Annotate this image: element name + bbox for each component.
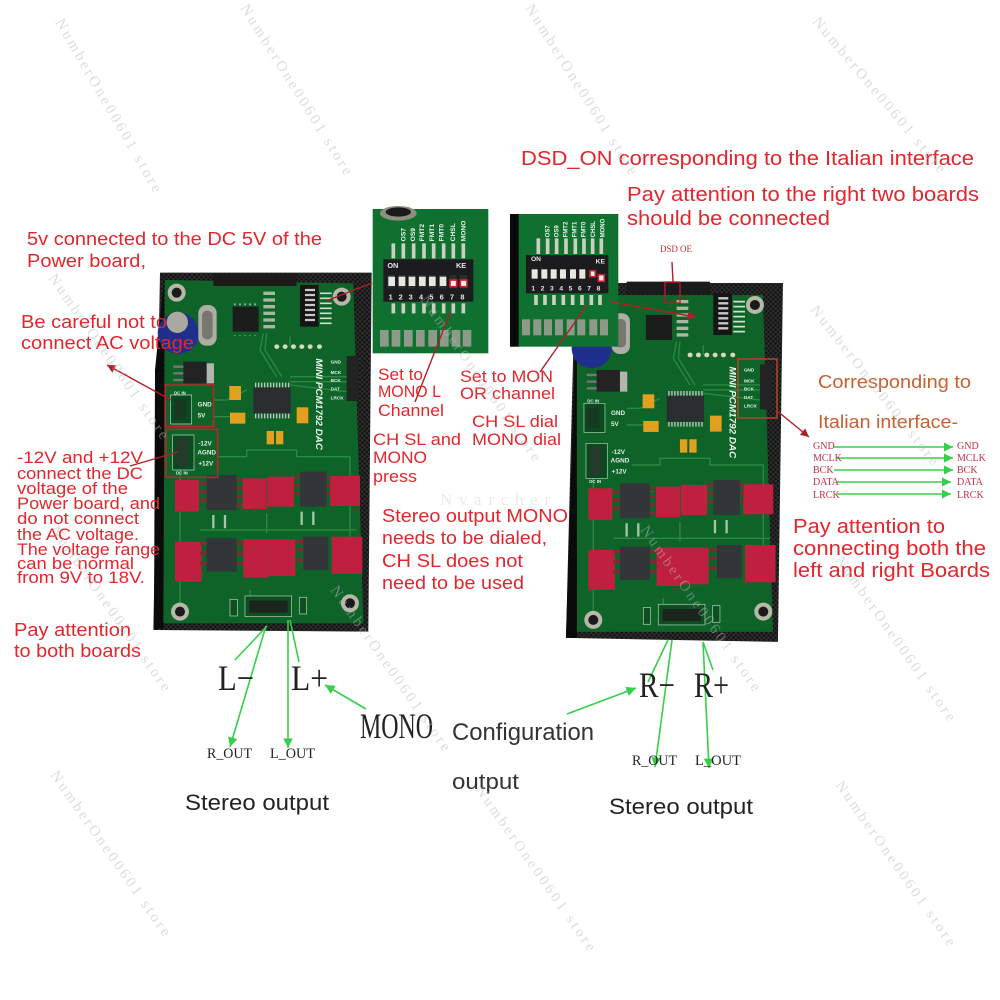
annotation: MONO L channel: Set to	[378, 365, 423, 384]
annotation: stereo output mode: needs to be dialed,	[382, 528, 547, 548]
output pin labels	[207, 658, 741, 769]
output pin labels: L_OUT	[270, 746, 315, 762]
label: DSD OE: DSD OE	[660, 244, 692, 254]
annotation: 12V supply: Power board, and	[17, 494, 160, 513]
annotation: MONO R channel: Set to MON	[460, 367, 553, 386]
annotation: both boards	[14, 620, 141, 661]
right PCB board: -12V	[612, 449, 626, 456]
annotation: 12V supply: can be normal	[17, 554, 134, 573]
store watermarks: NumberOne00601 store	[47, 523, 174, 695]
interface signal table: LRCK	[813, 490, 840, 501]
annotation: both boards: to both boards	[14, 641, 141, 661]
right DIP switch inset: 2	[541, 286, 545, 293]
right DIP switch inset: 7	[587, 286, 591, 293]
left PCB board: DAT	[331, 387, 340, 392]
store watermarks: NumberOne00601 store	[832, 553, 959, 725]
stereo output label left: Stereo output	[185, 790, 329, 815]
annotation: MONO L channel	[373, 365, 461, 486]
right PCB board: DC IN	[589, 479, 601, 484]
store watermarks: NumberOne00601 store	[417, 293, 544, 465]
store watermarks: Nvarcher	[440, 490, 550, 509]
right DIP switch inset: 6	[578, 286, 582, 293]
annotation: 12V supply: voltage of the	[17, 479, 128, 498]
right DIP switch inset: 1	[531, 286, 535, 293]
right DIP switch inset: FMT1	[573, 221, 579, 237]
annotation: stereo output mode	[382, 506, 568, 593]
store watermarks: NumberOne00601 store	[472, 783, 599, 955]
right DIP switch inset: 4	[559, 286, 563, 293]
annotation: MONO L channel: press	[373, 467, 417, 486]
left DIP switch inset: 1	[389, 292, 393, 301]
right DIP switch inset	[510, 214, 618, 347]
annotation: MONO R channel: OR channel	[460, 384, 555, 403]
annotation: AC warning: Be careful not to	[21, 312, 167, 332]
annotation: MONO L channel: Channel	[378, 401, 444, 420]
annotation: Italian interface	[818, 371, 971, 432]
configuration output label: output	[452, 769, 519, 794]
annotation: Italian interface: Corresponding to	[818, 371, 971, 392]
output pin labels: L+	[291, 658, 328, 698]
right PCB board: GND	[611, 410, 625, 417]
stereo output label right: Stereo output	[609, 794, 753, 819]
left DIP switch inset: KE	[456, 261, 466, 270]
annotation: Italian interface: Italian interface-	[818, 411, 958, 432]
green output wires	[230, 620, 713, 768]
annotation: both boards: Pay attention	[14, 620, 131, 640]
interface signal table: BCK	[957, 465, 978, 476]
output pin labels: MONO	[360, 706, 433, 746]
annotation: left and right boards: left and right Boards	[793, 560, 990, 582]
store watermarks: NumberOne00601 store	[327, 583, 454, 755]
interface signal table: MCLK	[813, 453, 843, 464]
output pin labels: L−	[218, 658, 254, 698]
store watermarks: NumberOne00601 store	[522, 2, 640, 178]
left PCB board: MINI PCM1792 DAC	[314, 358, 324, 451]
right DIP switch inset: 8	[597, 286, 601, 293]
left DIP switch inset: 8	[460, 292, 464, 301]
interface signal table: LRCK	[957, 490, 984, 501]
left DIP switch inset: ON	[387, 261, 398, 270]
right DIP switch inset: ON	[531, 256, 541, 263]
left PCB board: LRCK	[331, 395, 344, 400]
left DIP switch inset: 3	[409, 292, 413, 301]
output pin labels: R_OUT	[207, 746, 252, 762]
left DIP switch inset: 2	[399, 292, 403, 301]
right DIP switch inset: FMT2	[564, 221, 570, 237]
annotation: DSD_ON heading: DSD_ON corresponding to the Italian interface	[521, 148, 974, 170]
annotation: 12V supply: The voltage range	[17, 540, 160, 559]
annotation: connect right two boards: Pay attention to the right two boards	[627, 184, 979, 206]
annotation: stereo output mode: Stereo output MONO	[382, 506, 568, 526]
right DIP switch inset: MONO	[601, 218, 607, 237]
interface signal table: DATA	[957, 477, 984, 488]
left DIP switch inset: FMT2	[419, 224, 426, 241]
annotation: stereo output mode: CH SL does not	[382, 551, 523, 571]
left DIP switch inset: 6	[440, 292, 444, 301]
left DIP switch inset: OS7	[401, 228, 408, 241]
red boxes: power connectors	[165, 385, 218, 477]
left DIP switch inset: FMT0	[438, 224, 445, 241]
annotation: 12V supply	[17, 448, 160, 587]
left PCB board	[153, 273, 372, 632]
right DIP switch inset: 5	[569, 286, 573, 293]
annotation: MONO L channel: MONO	[373, 448, 427, 467]
annotation: MONO L channel: MONO L	[378, 382, 441, 401]
annotation: AC warning: connect AC voltage	[21, 333, 194, 353]
annotation: left and right boards: Pay attention to	[793, 516, 945, 538]
annotation: left and right boards: connecting both the	[793, 538, 986, 560]
interface signal table: GND	[957, 441, 979, 452]
output pin labels: L_OUT	[695, 753, 741, 769]
annotation: MONO R channel: MONO dial	[472, 430, 561, 449]
store watermarks: NumberOne00601 store	[237, 2, 355, 178]
right DIP switch inset: OS7	[546, 225, 552, 237]
right PCB board: AGND	[611, 458, 630, 465]
left PCB board: AGND	[197, 449, 216, 456]
left PCB board: GND	[331, 359, 342, 364]
annotation: 12V supply: do not connect	[17, 509, 139, 528]
left DIP switch inset: 7	[450, 292, 454, 301]
annotation: connect right two boards: should be connected	[627, 208, 830, 230]
store watermarks: NumberOne00601 store	[47, 768, 174, 940]
annotation: 5V power: Power board,	[27, 251, 146, 271]
left PCB board: 5V	[198, 413, 206, 420]
right PCB board: GND	[744, 368, 755, 373]
annotation: MONO L channel: CH SL and	[373, 430, 461, 449]
output pin labels: R+	[694, 665, 729, 705]
left DIP switch inset: OS9	[410, 228, 417, 241]
right PCB board	[566, 282, 783, 642]
annotation: AC warning	[21, 312, 194, 353]
right PCB board: BCK	[744, 386, 755, 391]
interface signal table	[813, 441, 987, 501]
right PCB board: 5V	[611, 421, 619, 428]
left PCB board: DC IN	[176, 471, 188, 476]
left PCB board: -12V	[198, 441, 212, 448]
annotation: 12V supply: -12V and +12V	[17, 448, 144, 467]
right DIP switch inset: KE	[596, 258, 605, 265]
annotation: 5V power	[27, 229, 322, 271]
right PCB board: DC IN	[587, 399, 599, 404]
left DIP switch inset	[373, 206, 488, 353]
left DIP switch inset: 4	[419, 292, 424, 301]
interface signal table: MCLK	[957, 453, 987, 464]
right DIP switch inset: FMT0	[582, 221, 588, 237]
output pin labels: R_OUT	[632, 753, 677, 769]
store watermarks: NumberOne00601 store	[809, 14, 949, 176]
annotation: 12V supply: connect the DC	[17, 464, 143, 483]
annotation: 12V supply: the AC voltage.	[17, 525, 139, 544]
annotation: MONO R channel: CH SL dial	[472, 412, 558, 431]
annotation: 12V supply: from 9V to 18V.	[17, 568, 145, 587]
output pin labels: R−	[639, 665, 675, 705]
left DIP switch inset: 5	[429, 292, 433, 301]
right PCB board: MCK	[744, 378, 755, 383]
interface signal table: BCK	[813, 465, 834, 476]
interface signal table: DATA	[813, 477, 840, 488]
interface signal table: GND	[813, 441, 835, 452]
right PCB board: DAT	[744, 395, 753, 400]
store watermarks: NumberOne00601 store	[807, 303, 942, 469]
right PCB board: MINI PCM1792 DAC	[727, 367, 737, 459]
right PCB board: +12V	[612, 469, 627, 476]
left DIP switch inset: FMT1	[429, 224, 436, 241]
configuration output label	[452, 719, 594, 794]
annotation: connect right two boards	[627, 184, 979, 230]
store watermarks: NumberOne00601 store	[45, 271, 172, 443]
left PCB board: BCK	[331, 378, 341, 383]
left PCB board: +12V	[198, 460, 214, 467]
annotation: left and right boards	[793, 516, 990, 582]
store watermarks: NumberOne00601 store	[637, 523, 764, 695]
left DIP switch inset: MONO	[460, 221, 467, 241]
red callout lines and arrows	[107, 262, 809, 466]
left PCB board: DC IN	[174, 390, 186, 395]
left DIP switch inset: CHSL	[450, 223, 457, 241]
left PCB board: GND	[198, 402, 212, 409]
configuration output label: Configuration	[452, 719, 594, 746]
annotation: stereo output mode: need to be used	[382, 573, 524, 593]
left PCB board: MCK	[331, 370, 342, 375]
right DIP switch inset: CHSL	[591, 221, 597, 237]
store watermarks: NumberOne00601 store	[52, 16, 165, 196]
annotation: 5V power: 5v connected to the DC 5V of the	[27, 229, 322, 249]
store watermarks: NumberOne00601 store	[832, 778, 959, 950]
right DIP switch inset: OS9	[554, 225, 560, 237]
annotation: MONO R channel	[460, 367, 561, 449]
right DIP switch inset: 3	[550, 286, 554, 293]
right PCB board: LRCK	[744, 404, 758, 409]
